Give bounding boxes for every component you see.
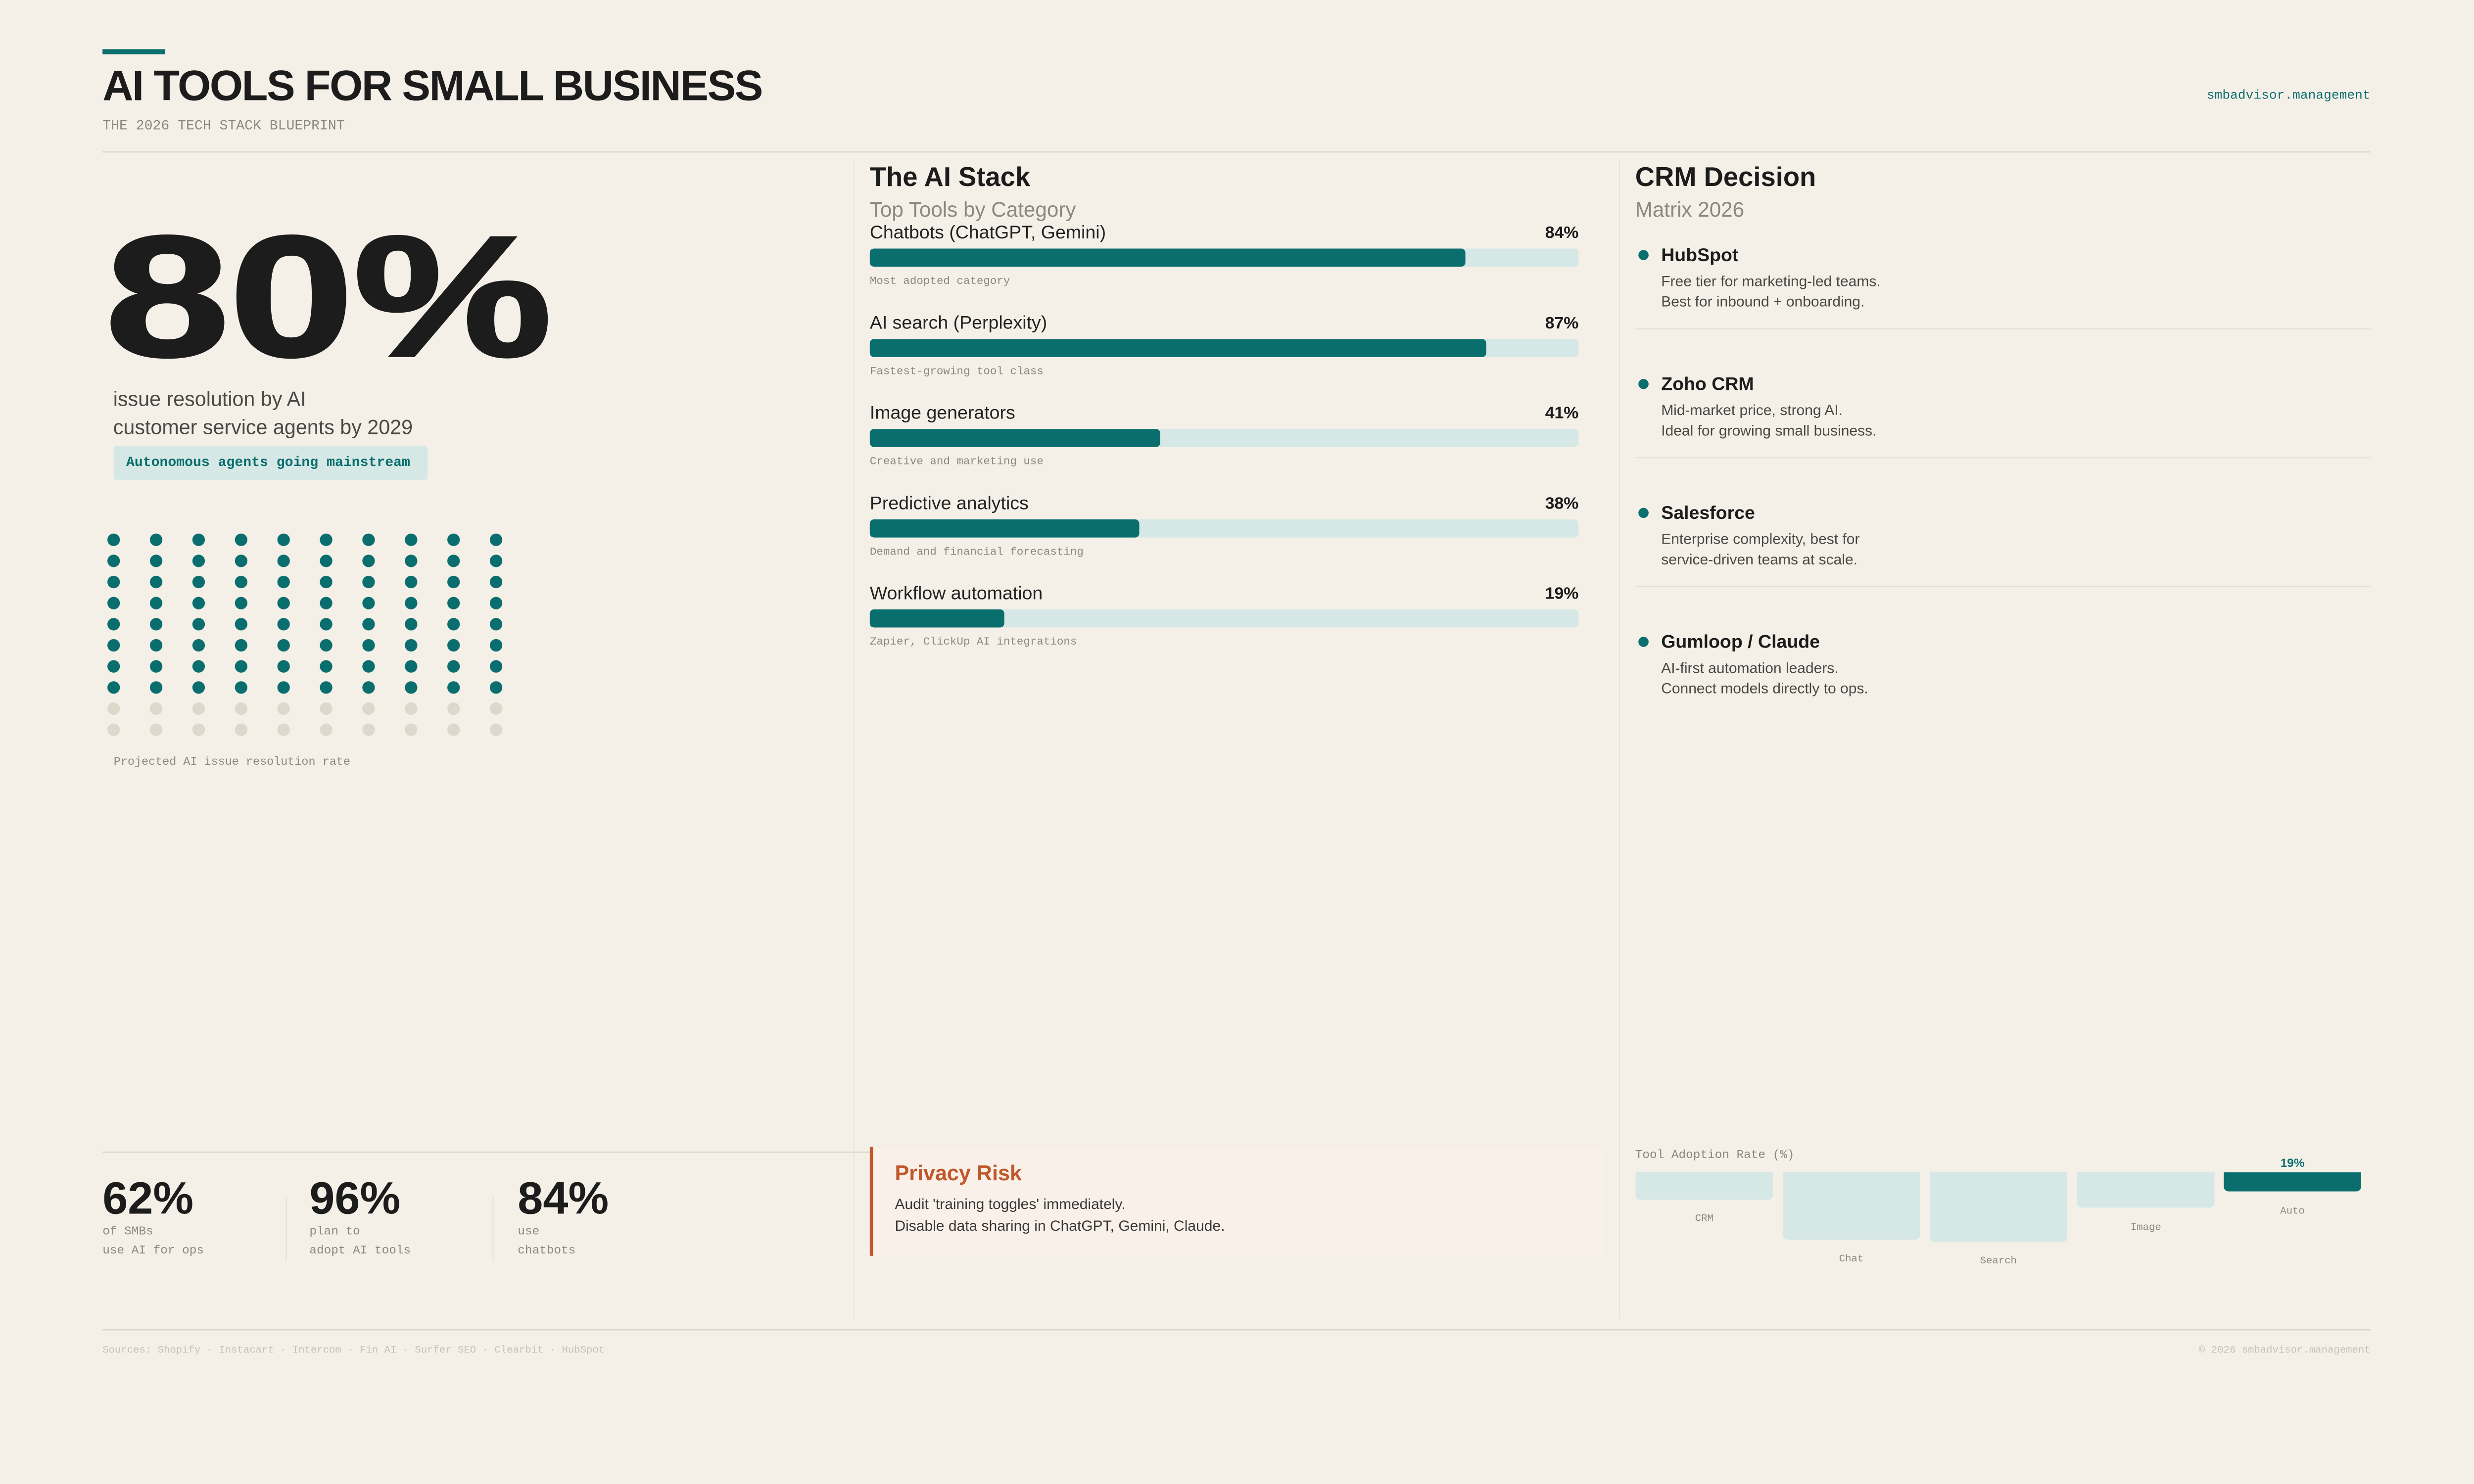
- item: Salesforce: Enterprise complexity, best for: [1661, 530, 1859, 547]
- stat 62%: 62%: [102, 1172, 193, 1223]
- footer copyright: © 2026 smbadvisor.management: [2199, 1345, 2371, 1356]
- tag: autonomous agents: [114, 446, 428, 480]
- item: Gumloop / Claude: [1638, 632, 1868, 696]
- chart: tool adoption rate: Tool Adoption Rate (%): [1635, 1148, 1794, 1161]
- item: Salesforce: Salesforce: [1661, 503, 1755, 523]
- heading: The AI Stack: [870, 162, 1030, 192]
- dot grid caption: Projected AI issue resolution rate: [114, 755, 350, 768]
- stat 96%: 96%: [309, 1172, 400, 1223]
- heading: CRM Decision: [1635, 162, 1816, 192]
- item: HubSpot: Free tier for marketing-led teams.: [1661, 273, 1881, 289]
- subheading: Top Tools by Category: [870, 197, 1076, 221]
- text: 19%: [2281, 1156, 2305, 1169]
- subheading: Matrix 2026: [1635, 197, 1744, 221]
- row: predictive analytics: [870, 493, 1578, 558]
- stat 84%: [518, 1172, 609, 1257]
- bar chart: tool categories: [870, 222, 1578, 649]
- dot grid chart: [107, 533, 503, 736]
- item: Gumloop / Claude: Connect models directly to ops.: [1661, 680, 1868, 696]
- item: Salesforce: [1638, 503, 1859, 568]
- big number 80%: 80%: [105, 201, 552, 392]
- stat 84%: 84%: [518, 1172, 609, 1223]
- text: Search: [1980, 1255, 2017, 1266]
- stat 84%: chatbots: [518, 1243, 575, 1257]
- row: workflow automation: Zapier, ClickUp AI integrations: [870, 636, 1077, 649]
- row: image generators: 41%: [1545, 403, 1578, 422]
- row: predictive analytics: 38%: [1545, 493, 1578, 512]
- row: workflow automation: 19%: [1545, 583, 1578, 603]
- callout: privacy risk: Privacy Risk: [895, 1161, 1022, 1185]
- stat 84%: use: [518, 1224, 539, 1238]
- panel: CRM decision: [1635, 162, 1881, 696]
- callout: privacy risk: Disable data sharing in ChatGPT, Gemini, Claude.: [895, 1217, 1225, 1234]
- item: Zoho CRM: [1638, 374, 1876, 439]
- item: HubSpot: Best for inbound + onboarding.: [1661, 293, 1864, 310]
- tag: autonomous agents: Autonomous agents going mainstream: [126, 455, 410, 471]
- header accent bar: [102, 49, 165, 54]
- panel: AI stack: [870, 162, 1076, 221]
- item: Zoho CRM: Zoho CRM: [1661, 374, 1754, 394]
- stat 96%: adopt AI tools: [309, 1243, 411, 1257]
- item: Zoho CRM: Mid-market price, strong AI.: [1661, 402, 1843, 418]
- hero description: customer service agents by 2029: [113, 416, 413, 439]
- callout: privacy risk: [870, 1147, 1602, 1256]
- row: chatbots: [870, 222, 1578, 287]
- text: Image: [2131, 1221, 2161, 1233]
- stat 96%: plan to: [309, 1224, 360, 1238]
- item: HubSpot: HubSpot: [1661, 245, 1738, 265]
- row: image generators: Creative and marketing use: [870, 456, 1044, 468]
- row: chatbots: Chatbots (ChatGPT, Gemini): [870, 222, 1106, 242]
- row: AI search: AI search (Perplexity): [870, 312, 1047, 333]
- item: Gumloop / Claude: Gumloop / Claude: [1661, 632, 1820, 652]
- stat 62%: use AI for ops: [102, 1243, 204, 1257]
- item: Gumloop / Claude: AI-first automation leaders.: [1661, 659, 1839, 676]
- text: CRM: [1695, 1213, 1713, 1224]
- row: image generators: Image generators: [870, 403, 1015, 423]
- callout: privacy risk: Audit 'training toggles' immediately.: [895, 1196, 1126, 1212]
- row: workflow automation: [870, 583, 1578, 649]
- row: AI search: Fastest-growing tool class: [870, 365, 1044, 378]
- row: chatbots: 84%: [1545, 223, 1578, 241]
- text: Auto: [2280, 1206, 2305, 1217]
- stat 96%: [309, 1172, 411, 1257]
- row: predictive analytics: Predictive analytics: [870, 493, 1029, 513]
- footer sources: Sources: Shopify · Instacart · Intercom · Fin AI · Surfer SEO · Clearbit · HubSpot: [102, 1345, 605, 1356]
- row: image generators: [870, 403, 1578, 468]
- stat 62%: of SMBs: [102, 1224, 153, 1238]
- title: AI TOOLS FOR SMALL BUSINESS: [102, 62, 762, 109]
- stat 62%: [102, 1172, 204, 1257]
- row: AI search: 87%: [1545, 313, 1578, 332]
- row: workflow automation: Workflow automation: [870, 583, 1043, 603]
- site url: smbadvisor.management: [2207, 89, 2371, 103]
- item: HubSpot: [1638, 245, 1881, 310]
- item: Salesforce: service-driven teams at scale.: [1661, 551, 1857, 568]
- hero description: [113, 388, 413, 439]
- row: predictive analytics: Demand and financial forecasting: [870, 546, 1084, 558]
- panel: hero stat: [105, 201, 552, 768]
- row: AI search: [870, 312, 1578, 378]
- item: Zoho CRM: Ideal for growing small business.: [1661, 422, 1876, 439]
- text: Chat: [1839, 1253, 1863, 1265]
- subtitle: THE 2026 TECH STACK BLUEPRINT: [102, 118, 345, 134]
- panel: bottom stats: [102, 1152, 870, 1261]
- hero description: issue resolution by AI: [113, 388, 306, 411]
- row: chatbots: Most adopted category: [870, 275, 1010, 287]
